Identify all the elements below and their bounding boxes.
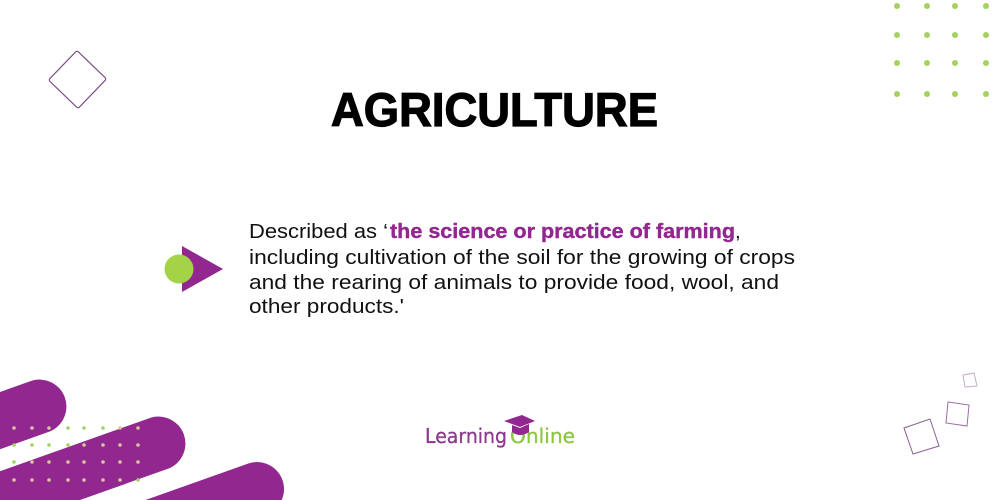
logo: Learning Online: Online <box>510 424 575 448</box>
icon: diamond outline <box>49 51 106 108</box>
definition text: Described as ‘ <box>249 220 388 243</box>
definition text <box>249 220 795 318</box>
decorative squares: bottom right <box>904 373 977 454</box>
dot grid: top right <box>894 3 989 97</box>
title: AGRICULTURE <box>331 83 658 136</box>
definition text: the science or practice of farming <box>390 220 735 243</box>
icon: graduation cap <box>504 415 535 435</box>
decorative purple pills <box>0 380 284 500</box>
logo: Learning Online: Learning <box>425 424 507 448</box>
definition text: and the rearing of animals to provide food, wool, and <box>249 271 779 294</box>
definition text: , <box>735 220 741 243</box>
logo: Learning Online <box>425 415 575 448</box>
icon: arrow with circle <box>164 246 223 292</box>
definition text: other products.' <box>249 295 404 318</box>
definition text: including cultivation of the soil for the growing of crops <box>249 246 795 269</box>
dot grid: bottom left <box>12 426 140 482</box>
